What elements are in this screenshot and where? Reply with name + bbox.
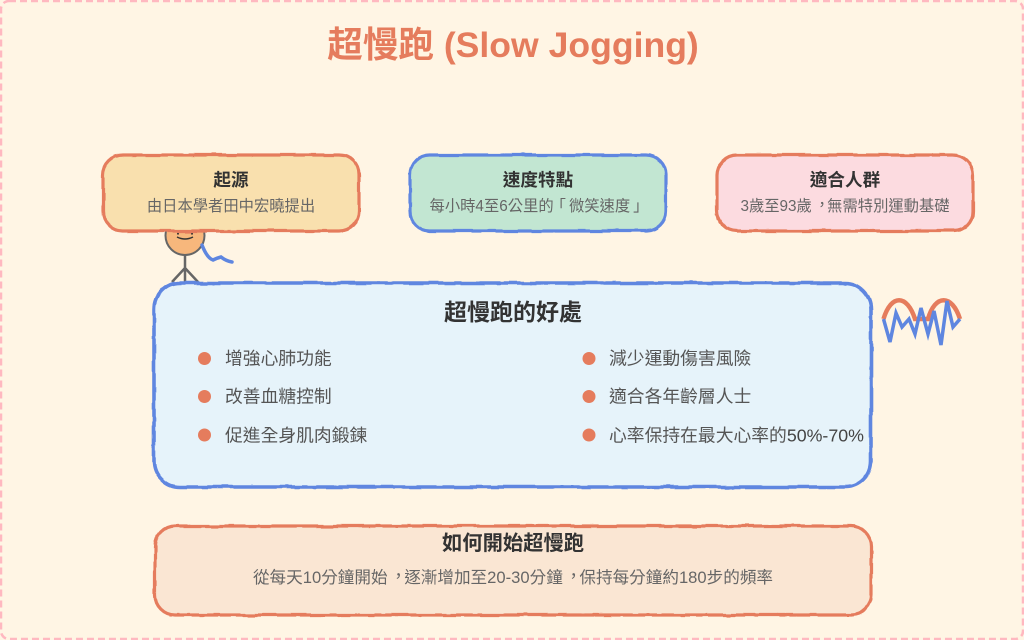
benefit: muscle training: 促進全身肌肉鍛鍊 <box>225 426 367 446</box>
panel heading: 超慢跑的好處 <box>444 299 582 325</box>
panel: how to start <box>155 526 871 615</box>
figure smile <box>177 237 193 239</box>
card text: 由日本學者田中宏曉提出 <box>147 197 315 215</box>
card: suitable people <box>717 155 973 231</box>
panel: benefits <box>154 283 871 487</box>
benefit: blood sugar: 改善血糖控制 <box>225 386 332 406</box>
card heading: 適合人群 <box>810 170 881 190</box>
card heading: 速度特點 <box>503 170 574 190</box>
figure body and legs <box>172 255 198 282</box>
blue pulse line <box>884 301 960 345</box>
benefit: lung function: 增強心肺功能 <box>225 348 332 368</box>
benefit: all ages: 適合各年齡層人士 <box>609 386 751 406</box>
figure eyes <box>178 232 192 234</box>
panel text: ， <box>390 567 407 586</box>
card background <box>410 155 666 231</box>
card background <box>717 155 973 231</box>
panel text: 從每天10分鐘開始 <box>253 568 388 587</box>
panel text: 保持每分鐘約180步的頻率 <box>579 568 773 587</box>
card text: ， <box>814 197 830 214</box>
icon: stick figure runner <box>166 216 232 282</box>
panel text: ， <box>565 567 582 586</box>
orange arc wave <box>884 300 960 319</box>
panel background <box>155 526 871 615</box>
figure head <box>166 216 204 255</box>
card: speed <box>410 155 666 231</box>
benefit: heart rate: 心率保持在最大心率的50%-70% <box>609 426 864 446</box>
icon: heartbeat wave <box>884 300 960 345</box>
card: origin <box>103 155 359 231</box>
title: 超慢跑 (Slow Jogging) <box>327 25 699 65</box>
card text: 每小時4至6公里的「微笑速度」 <box>430 198 648 215</box>
card background <box>103 155 359 231</box>
card text: 3歲至93歲 <box>740 198 812 215</box>
benefit: injury risk: 減少運動傷害風險 <box>609 348 751 368</box>
card text: 無需特別運動基礎 <box>827 198 950 215</box>
card heading: 起源 <box>213 170 249 190</box>
panel heading: 如何開始超慢跑 <box>442 532 584 555</box>
panel text: 逐漸增加至20-30分鐘 <box>404 568 563 587</box>
panel background <box>154 283 871 487</box>
motion line <box>202 245 232 262</box>
